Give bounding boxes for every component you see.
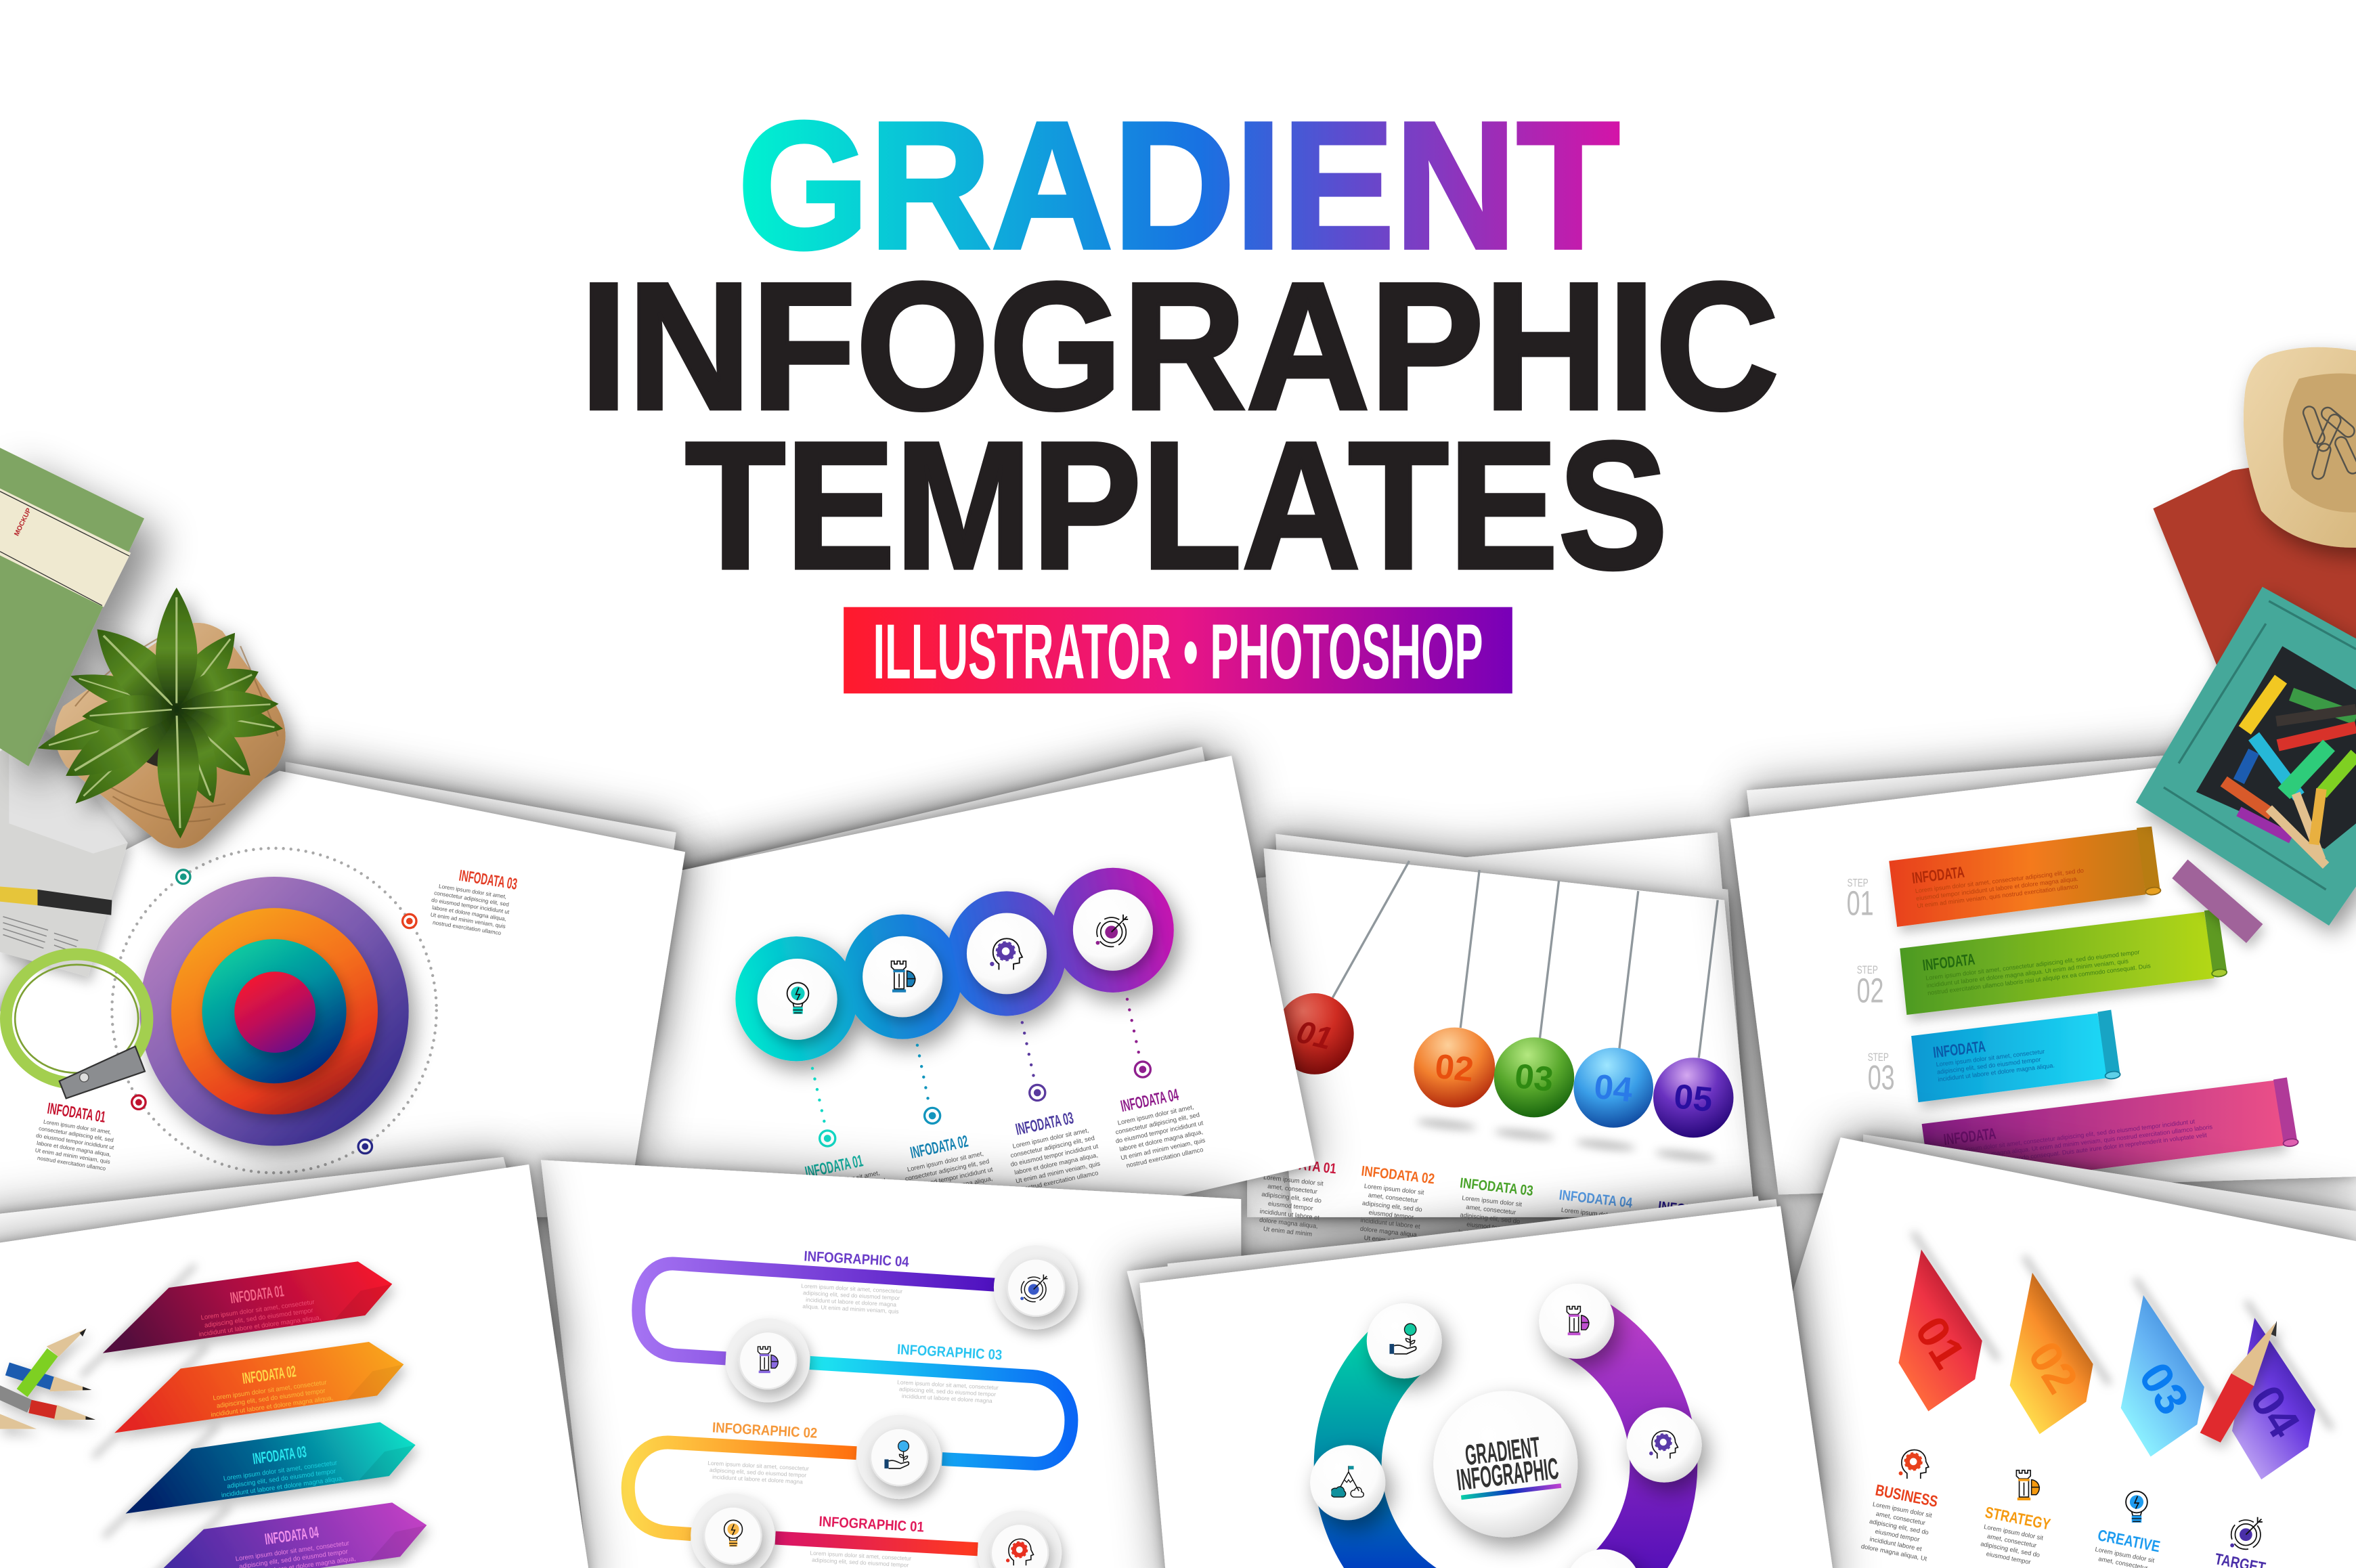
- text block: infodata 01: Ut enim ad minim veniam, quis: [35, 1147, 110, 1165]
- panel: ribbons sheet: [1730, 744, 2356, 1194]
- text block: infodata 02: [1353, 1163, 1435, 1248]
- text block: infographic 04: adipiscing elit, sed do eiusmod tempor: [803, 1289, 900, 1301]
- ball 02: [1414, 1028, 1495, 1108]
- arrow 02: INFODATA 02: [241, 1362, 297, 1387]
- text block: infodata 03: INFODATA 03: [458, 867, 519, 893]
- panel: flags sheet: [1773, 1137, 2356, 1568]
- text block: infographic 04: INFOGRAPHIC 04: [804, 1248, 909, 1270]
- ribbon cyan: incididunt ut labore et dolore magna aliqua.: [1938, 1062, 2055, 1083]
- text block: infodata 03: [1002, 1105, 1104, 1194]
- text block: infodata 01: consectetur adipiscing elit, sed: [39, 1125, 114, 1144]
- teal pencil box: [2136, 587, 2356, 925]
- ribbon cyan: adipiscing elit, sed do eiusmod tempor: [1937, 1056, 2041, 1075]
- text block: infodata 03: Lorem ipsum dolor sit amet,: [438, 884, 507, 900]
- text block: infodata 04: Lorem ipsum dolor sit: [1561, 1206, 1621, 1220]
- button: target: [1073, 890, 1153, 971]
- text block: infographic 02: incididunt ut labore et dolore magna: [712, 1473, 803, 1485]
- button: rook: [1539, 1284, 1614, 1359]
- flag 03: 03: [2129, 1354, 2198, 1423]
- text block: infodata 01: [795, 1148, 886, 1202]
- text block: strategy: [1977, 1503, 2052, 1568]
- snake path purple: [638, 1263, 995, 1358]
- text block: infodata 01: adipiscing elit, sed do: [1261, 1191, 1322, 1204]
- text block: infodata 04: nostrud exercitation ullamco: [1126, 1146, 1204, 1169]
- text block: infodata 01: INFODATA 01: [1262, 1153, 1337, 1177]
- node: head: [978, 1510, 1062, 1568]
- center button: INFOGRAPHIC: [1455, 1452, 1561, 1497]
- text block: infodata 03: nostrud exercitation ullamco: [1021, 1169, 1099, 1192]
- panel: arrows sheet: [0, 1164, 592, 1568]
- text block: infodata 02: Lorem ipsum dolor sit: [1364, 1183, 1424, 1196]
- text block: infodata 02: Lorem ipsum dolor sit amet,: [907, 1150, 984, 1173]
- text block: strategy: amet, consectetur: [1986, 1533, 2037, 1549]
- text block: business: BUSINESS: [1874, 1481, 1939, 1510]
- title line: templates: TEMPLATES: [685, 404, 1668, 607]
- text block: infodata 01: Ut enim ad minim: [1263, 1225, 1313, 1238]
- ribbon pink: labore et dolore magna aliqua. Ut enim ad minim veniam, quis nostrud exercitation ullamco laboris: [1947, 1123, 2213, 1162]
- text block: infographic 01: INFOGRAPHIC 01: [819, 1514, 925, 1536]
- ribbon orange: eiusmod tempor incididunt ut labore et dolore magna aliqua.: [1916, 875, 2078, 902]
- text block: infodata 03: incididunt ut labore et: [1458, 1229, 1519, 1242]
- text block: infodata 02: incididunt ut labore et: [1360, 1217, 1421, 1230]
- ribbon pink: Lorem ipsum dolor sit amet, consectetur adipiscing elit, sed do eiusmod tempor incididunt ut: [1946, 1118, 2196, 1155]
- text block: infographic 04: [800, 1248, 909, 1315]
- panel: linked circles sheet: [589, 756, 1315, 1322]
- text block: infodata 02: INFODATA 02: [1361, 1163, 1435, 1187]
- text block: infodata 02: dolore magna aliqua,: [1359, 1225, 1419, 1238]
- arrow cut shadows: [81, 1265, 230, 1568]
- text block: infodata 02: [896, 1129, 995, 1200]
- text block: strategy: eiusmod tempor: [1986, 1550, 2032, 1565]
- ring arc right: [1506, 1324, 1663, 1568]
- text block: infographic 02: adipiscing elit, sed do eiusmod tempor: [710, 1466, 807, 1479]
- text block: infodata 03: [1454, 1175, 1534, 1243]
- red pencil: [2200, 1321, 2277, 1443]
- text block: infodata 03: labore et dolore magna aliqua,: [432, 905, 506, 922]
- arrow 02: incididunt ut labore et dolore magna aliqua,: [211, 1394, 334, 1419]
- panel: snake timeline sheet: [541, 1160, 1241, 1568]
- ribbon green: incididunt ut labore et dolore magna aliqua. Ut enim ad minim veniam, quis: [1926, 957, 2129, 989]
- ball 02: 02: [1433, 1047, 1475, 1089]
- text block: infodata 02: Ut enim ad minim: [1364, 1234, 1414, 1246]
- text block: creative: [2093, 1526, 2162, 1568]
- concentric discs: [139, 877, 409, 1146]
- icon: head: [1899, 1450, 1929, 1479]
- node: hand: [857, 1415, 941, 1499]
- text block: infodata 03: eiusmod tempor: [1466, 1221, 1512, 1233]
- ribbon green: nostrud exercitation ullamco laboris nisi ut aliquip ex ea commodo consequat. Duis: [1927, 962, 2152, 997]
- arrow 03: incididunt ut labore et dolore magna aliqua,: [221, 1475, 344, 1499]
- step labels: STEP: [1848, 876, 1869, 889]
- flag 02: [2010, 1273, 2093, 1434]
- snake path red: [775, 1538, 978, 1549]
- ribbon orange: [1889, 827, 2161, 927]
- flag 02: 02: [2018, 1333, 2087, 1402]
- back paper sheets behind pendulum: [1247, 833, 1751, 1217]
- panel: ring diagram sheet: [1139, 1206, 1836, 1568]
- text block: infodata 04: [1107, 1082, 1209, 1170]
- text block: infodata 03: nostrud exercitation ullamco: [432, 919, 502, 936]
- text block: infographic 03: Lorem ipsum dolor sit amet, consectetur: [897, 1378, 999, 1391]
- flag cut shadows: [1913, 1232, 2332, 1429]
- center button: GRADIENT: [1464, 1431, 1542, 1471]
- text block: infodata 01: eiusmod tempor: [1268, 1200, 1313, 1212]
- green book: [0, 448, 144, 766]
- text block: infographic 02: [707, 1420, 818, 1486]
- center button: [1433, 1391, 1577, 1538]
- plant in wooden pot: [33, 588, 286, 848]
- text block: infodata 03: adipiscing elit, sed do: [1460, 1211, 1521, 1225]
- ribbon orange: INFODATA: [1911, 863, 1965, 887]
- text block: infodata 03: [428, 863, 519, 938]
- back sheet behind flags panel: [1863, 1135, 2356, 1427]
- ball 04: 04: [1592, 1067, 1635, 1109]
- panel: pendulum balls sheet: [1255, 848, 1755, 1248]
- back sheet behind arrows panel: [0, 1157, 556, 1352]
- text block: strategy: STRATEGY: [1984, 1503, 2052, 1533]
- text block: infographic 04: Lorem ipsum dolor sit amet, consectetur: [801, 1282, 902, 1294]
- arrow 03: adipiscing elit, sed do eiusmod tempor: [227, 1468, 336, 1490]
- button: rook: [863, 936, 942, 1018]
- text block: infodata 03: Lorem ipsum dolor sit: [1462, 1194, 1523, 1208]
- ball shadows: [1416, 1118, 1716, 1162]
- arrow 04: INFODATA 04: [263, 1523, 320, 1548]
- text block: infodata 01: [1255, 1153, 1337, 1240]
- ball 03: 03: [1513, 1056, 1555, 1099]
- ball 01: [1275, 993, 1354, 1074]
- text block: infodata 03: Lorem ipsum dolor sit amet,: [1012, 1127, 1089, 1150]
- flag 01: 01: [1905, 1308, 1974, 1377]
- ribbon green: INFODATA: [1921, 950, 1976, 974]
- ribbon pink: INFODATA: [1942, 1125, 1997, 1148]
- step labels: STEP: [1868, 1051, 1889, 1064]
- text block: business: amet, consectetur: [1875, 1510, 1926, 1527]
- step labels: 01: [1847, 884, 1874, 923]
- text block: infodata 01: amet, consectetur: [1267, 1183, 1317, 1195]
- text block: infodata 02: INFODATA 02: [909, 1133, 970, 1162]
- ribbon green: [1900, 909, 2227, 1015]
- ball 05: 05: [1672, 1076, 1714, 1119]
- text block: infodata 03: do eiusmod tempor incididunt ut: [431, 897, 510, 915]
- flag 03: [2121, 1295, 2204, 1457]
- text block: creative: Lorem ipsum dolor sit: [2095, 1546, 2155, 1564]
- snake path blue: [810, 1363, 1071, 1464]
- snake path orange: [628, 1443, 856, 1534]
- text block: strategy: Lorem ipsum dolor sit: [1984, 1523, 2044, 1542]
- ribbon cyan: [1911, 1009, 2120, 1102]
- text block: infodata 01: labore et dolore magna aliqua,: [37, 1140, 111, 1158]
- text block: infodata 04: Ut enim ad minim veniam, quis: [1120, 1137, 1206, 1161]
- text block: infodata 03: Ut enim ad minim veniam, quis: [430, 912, 506, 930]
- text block: infodata 03: labore et dolore magna aliqua,: [1013, 1152, 1099, 1176]
- text block: infodata 03: Ut enim ad minim veniam, quis: [1015, 1160, 1101, 1185]
- ribbon orange: Lorem ipsum dolor sit amet, consectetur adipiscing elit, sed do: [1915, 867, 2084, 894]
- ball 03: [1494, 1037, 1574, 1117]
- title line: infographic: INFOGRAPHIC: [580, 245, 1779, 448]
- arrow 01: INFODATA 01: [229, 1282, 285, 1307]
- markers: [820, 1062, 1150, 1146]
- text block: strategy: adipiscing elit, sed do: [1980, 1540, 2041, 1559]
- back sheet behind ribbons panel: [1747, 737, 2356, 1142]
- text block: infographic 01: Lorem ipsum dolor sit amet, consectetur: [810, 1550, 911, 1562]
- text block: infodata 01: Lorem ipsum dolor sit amet,: [43, 1118, 112, 1135]
- text block: infodata 02: adipiscing elit, sed do: [1362, 1200, 1422, 1213]
- text block: infodata 01: Lorem ipsum dolor sit amet,: [803, 1169, 880, 1192]
- text block: infodata 01: Lorem ipsum dolor sit: [1263, 1174, 1324, 1187]
- title line: gradient: GRADIENT: [738, 84, 1619, 286]
- button: bottom: [1566, 1549, 1641, 1568]
- ribbon cyan: Lorem ipsum dolor sit amet, consectetur: [1936, 1048, 2045, 1068]
- wooden paperclip bowl: [2244, 347, 2356, 548]
- yellow pencil with clip: [0, 886, 112, 915]
- text block: infographic 04: aliqua. Ut enim ad minim veniam, quis: [802, 1303, 899, 1315]
- ribbon orange: Ut enim ad minim veniam, quis nostrud exercitation ullamco: [1917, 883, 2078, 909]
- ribbon cyan: INFODATA: [1932, 1037, 1986, 1061]
- orbit markers: [132, 870, 416, 1154]
- desk paper with envelope: [0, 724, 128, 977]
- flag 04: 04: [2240, 1377, 2309, 1446]
- smart watch: [6, 954, 148, 1098]
- text block: infodata 03: consectetur adipiscing elit, sed: [434, 890, 510, 908]
- arrow 01: adipiscing elit, sed do eiusmod tempor: [204, 1307, 314, 1330]
- text block: infodata 02: do eiusmod tempor incididunt ut: [904, 1166, 994, 1191]
- ball 04: [1573, 1048, 1653, 1128]
- subtitle banner: ILLUSTRATOR • PHOTOSHOP: [873, 609, 1483, 695]
- text block: infodata 04: Lorem ipsum dolor sit amet,: [1117, 1104, 1194, 1127]
- text block: business: Lorem ipsum dolor sit: [1872, 1501, 1933, 1519]
- text block: infodata 03: do eiusmod tempor incididunt ut: [1010, 1143, 1099, 1168]
- pencils group: [0, 1328, 95, 1429]
- ribbon pink: [1922, 1077, 2298, 1190]
- arrow 03: [126, 1422, 416, 1514]
- pendulum strings: [1332, 861, 1718, 1058]
- text block: infodata 03: amet, consectetur: [1466, 1204, 1517, 1216]
- gradient linked discs: [735, 868, 1174, 1061]
- ball 01: 01: [1293, 1014, 1336, 1056]
- text block: infodata 04: INFODATA 04: [1119, 1086, 1180, 1116]
- text block: infodata 04: do eiusmod tempor incididunt ut: [1115, 1119, 1204, 1145]
- text block: infographic 02: INFOGRAPHIC 02: [712, 1420, 818, 1441]
- text block: infodata 01: dolore magna aliqua,: [1259, 1217, 1318, 1229]
- text block: infodata 04: [1556, 1188, 1634, 1229]
- arrow 04: Lorem ipsum dolor sit amet, consectetur: [235, 1540, 350, 1563]
- step labels: 02: [1856, 971, 1883, 1009]
- text block: infodata 04: consectetur adipiscing elit, sed: [1115, 1111, 1200, 1135]
- step labels: STEP: [1878, 1138, 1899, 1151]
- green book: MOCKUP: [13, 507, 33, 538]
- text block: infodata 02: eiusmod tempor: [1368, 1209, 1414, 1221]
- text block: infodata 03: INFODATA 03: [1014, 1109, 1075, 1139]
- text block: infodata 01: [32, 1098, 121, 1173]
- eraser: [2172, 860, 2263, 943]
- text block: business: eiusmod tempor: [1875, 1528, 1920, 1543]
- text block: infodata 04: amet, consectetur: [1565, 1215, 1615, 1228]
- title: [580, 84, 1779, 607]
- pencils inside box: [2224, 679, 2356, 865]
- text block: infodata 02: consectetur adipiscing elit, sed: [904, 1158, 990, 1182]
- button: mountain: [1310, 1445, 1385, 1520]
- text block: infodata 01: nostrud exercitation ullamco: [37, 1155, 106, 1172]
- dotted orbit: [112, 848, 437, 1173]
- step labels: [1847, 876, 1899, 1151]
- ribbon green: Lorem ipsum dolor sit amet, consectetur adipiscing elit, sed do eiusmod tempor: [1925, 949, 2140, 982]
- text block: infographic 03: INFOGRAPHIC 03: [896, 1342, 1003, 1363]
- text block: infographic 04: incididunt ut labore et dolore magna: [806, 1296, 897, 1308]
- button: bulb: [758, 959, 837, 1040]
- button: head: [967, 913, 1047, 994]
- red envelope: [2153, 451, 2356, 668]
- text block: business: adipiscing elit, sed do: [1869, 1518, 1929, 1536]
- text block: infodata 03: consectetur adipiscing elit, sed: [1010, 1135, 1095, 1159]
- button: head: [1627, 1408, 1702, 1483]
- text block: infodata 01: incididunt ut labore et: [1259, 1208, 1320, 1221]
- icon: rook: [2016, 1471, 2040, 1500]
- text block: infographic 03: incididunt ut labore et dolore magna: [902, 1393, 992, 1404]
- back sheet behind concentric panel: [286, 762, 676, 1052]
- node: rook: [726, 1318, 810, 1402]
- node: bulb: [691, 1494, 775, 1568]
- panel: concentric circles sheet: [0, 771, 685, 1217]
- text block: infodata 05: INFODATA 05: [1657, 1199, 1732, 1223]
- arrow 03: INFODATA 03: [252, 1443, 307, 1468]
- step labels: 03: [1868, 1058, 1895, 1097]
- back sheets behind ring panel: [1127, 1196, 1818, 1502]
- arrow 01: Lorem ipsum dolor sit amet, consectetur: [200, 1299, 315, 1322]
- ring arc left: [1348, 1341, 1506, 1568]
- flag 04: [2232, 1317, 2315, 1479]
- text block: infodata 02: amet, consectetur: [1368, 1192, 1418, 1204]
- icon: target: [2230, 1517, 2263, 1549]
- node: target: [994, 1245, 1078, 1330]
- text block: business: [1860, 1481, 1940, 1563]
- arrow 04: [137, 1502, 427, 1568]
- dotted connectors: [812, 999, 1139, 1123]
- arrow 01: incididunt ut labore et dolore magna aliqua,: [198, 1314, 322, 1338]
- arrow 02: [114, 1342, 403, 1433]
- arrow 02: Lorem ipsum dolor sit amet, consectetur: [213, 1379, 327, 1402]
- ball 05: [1653, 1058, 1734, 1137]
- arrow 02: adipiscing elit, sed do eiusmod tempor: [216, 1387, 326, 1410]
- text block: business: dolore magna aliqua, Ut: [1860, 1543, 1928, 1563]
- text block: infographic 02: Lorem ipsum dolor sit amet, consectetur: [707, 1460, 809, 1472]
- text block: infographic 03: adipiscing elit, sed do eiusmod tempor: [899, 1385, 996, 1397]
- text block: business: incididunt labore et: [1869, 1536, 1923, 1552]
- text block: infodata 01: INFODATA 01: [804, 1152, 865, 1182]
- icon: bulb: [2126, 1491, 2147, 1523]
- text block: infographic 03: [894, 1342, 1003, 1405]
- text block: infodata 01: consectetur adipiscing elit, sed: [801, 1177, 886, 1202]
- text block: infodata 04: labore et dolore magna aliqua,: [1119, 1129, 1204, 1153]
- text block: infodata 03: INFODATA 03: [1459, 1175, 1534, 1199]
- subtitle banner: [844, 607, 1512, 695]
- text block: infodata 01: INFODATA 01: [46, 1099, 107, 1126]
- text block: infodata 01: do eiusmod tempor incididunt ut: [36, 1133, 115, 1151]
- text block: infodata 02: labore et dolore magna aliqua,: [909, 1175, 993, 1199]
- button: hand: [1367, 1303, 1442, 1378]
- text block: infographic 01: [810, 1513, 925, 1568]
- text block: infodata 04: INFODATA 04: [1558, 1188, 1634, 1211]
- text block: creative: CREATIVE: [2096, 1526, 2162, 1555]
- ribbon pink: nisi ut aliquip ex ea commodo consequat. Duis aute irure dolor in reprehenderit in voluptate velit: [1948, 1131, 2208, 1170]
- step labels: STEP: [1857, 963, 1878, 976]
- back sheet behind circles panel: [646, 747, 1232, 1052]
- arrow 03: Lorem ipsum dolor sit amet, consectetur: [223, 1459, 338, 1483]
- flag 01: [1898, 1250, 1982, 1411]
- arrow 01: [103, 1261, 392, 1353]
